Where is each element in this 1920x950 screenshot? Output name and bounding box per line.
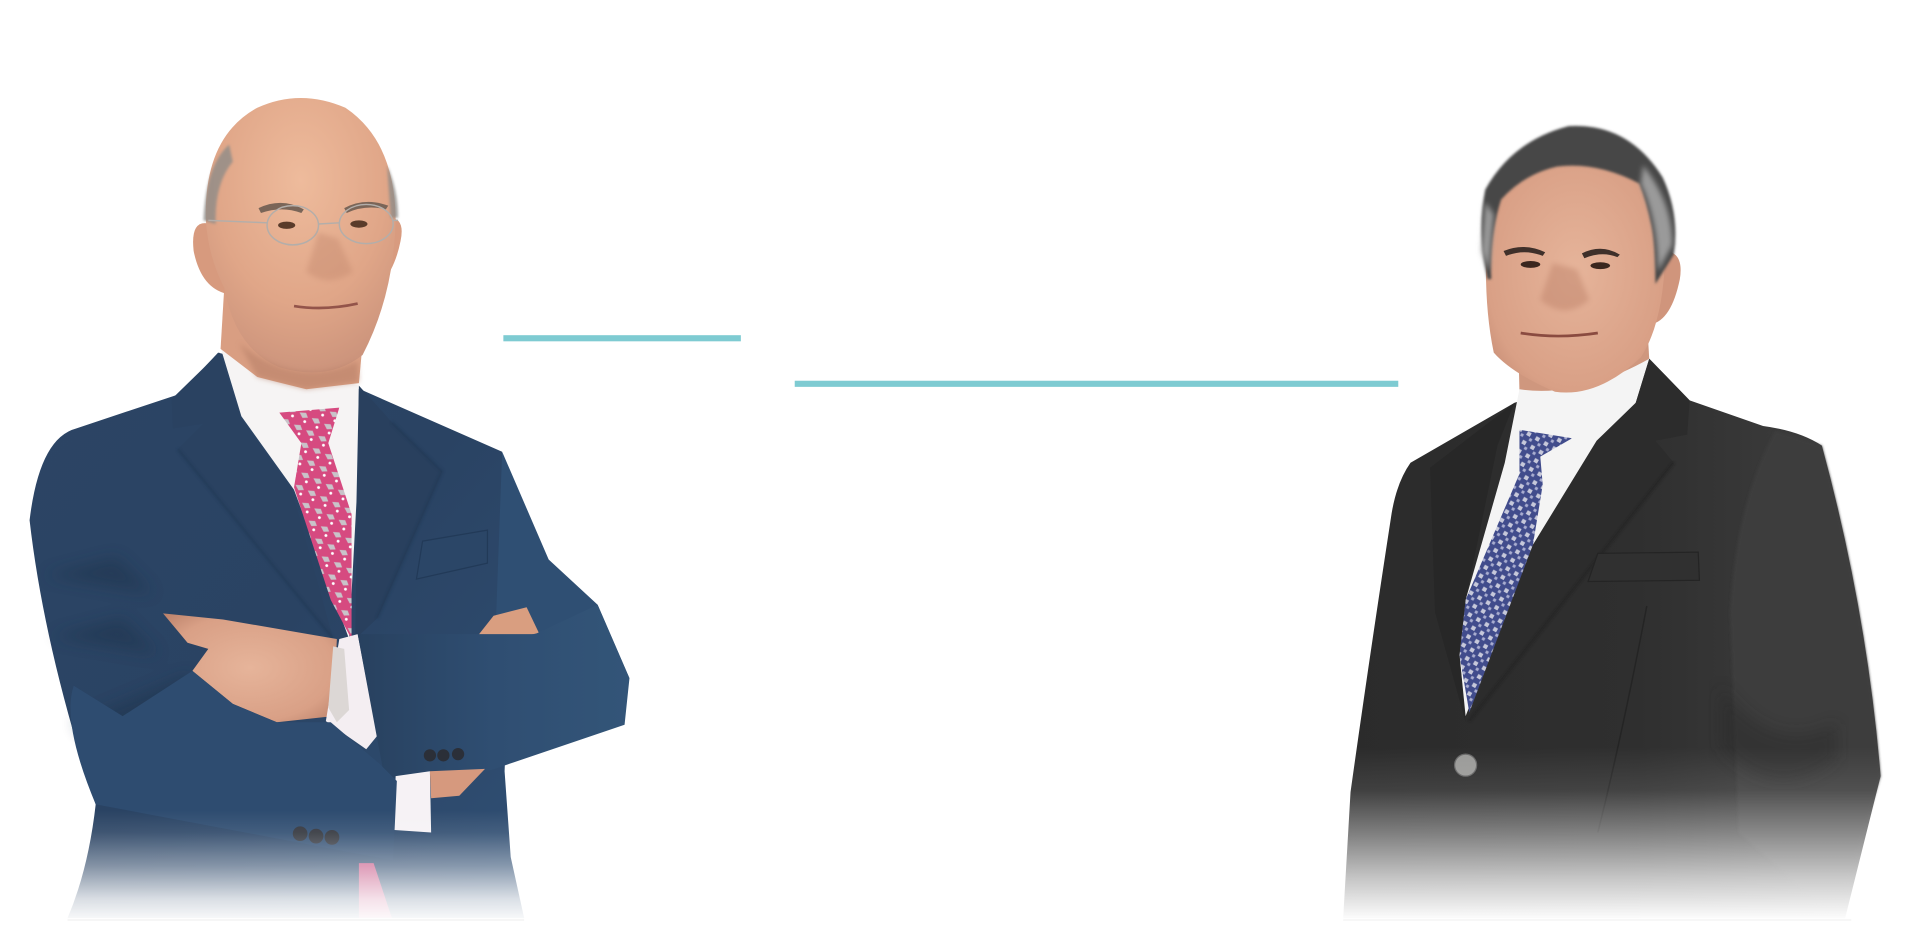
breast pocket <box>416 530 487 579</box>
rear fingers <box>475 607 539 644</box>
shirt <box>1459 359 1649 716</box>
left lapel <box>172 353 333 639</box>
lower tie <box>359 863 392 918</box>
fold shadows on upper arm <box>44 557 196 765</box>
right upper arm <box>496 452 629 678</box>
nose <box>1540 263 1589 310</box>
side shadow <box>1720 686 1837 781</box>
left ear <box>193 223 227 294</box>
eyebrows <box>1504 247 1620 258</box>
crossing forearm sleeve <box>358 605 629 779</box>
side hair <box>203 144 398 224</box>
breast pocket <box>1588 552 1699 582</box>
tie <box>279 408 352 639</box>
lower shirt cuff <box>394 771 431 832</box>
right ear <box>377 218 402 288</box>
head <box>206 98 396 372</box>
eyes <box>278 220 367 229</box>
mouth <box>294 304 358 308</box>
neck <box>221 288 364 389</box>
nose <box>306 233 353 280</box>
person: right executive in charcoal suit <box>1328 126 1904 921</box>
fade <box>37 810 539 921</box>
neck <box>1518 318 1649 404</box>
head <box>1486 149 1665 393</box>
jacket body <box>30 353 524 918</box>
eyebrows <box>259 202 388 213</box>
cuff <box>326 634 377 749</box>
person: left executive in navy suit <box>30 98 629 921</box>
main lapel <box>1469 359 1690 721</box>
lower sleeve buttons <box>293 826 339 845</box>
mouth <box>1521 333 1598 336</box>
forearm buttons <box>424 748 464 761</box>
accent bar: short <box>503 335 741 341</box>
tie <box>1459 430 1572 712</box>
accent bar: long <box>795 381 1398 387</box>
chin shadow <box>239 343 359 389</box>
lapel shadow <box>178 422 442 639</box>
right sleeve tone <box>1730 431 1881 918</box>
lower wrist <box>430 769 485 798</box>
coat button <box>1455 754 1477 776</box>
right ear <box>1650 251 1681 324</box>
hair highlights <box>1482 165 1672 272</box>
forward hand <box>163 613 337 722</box>
watch <box>328 646 349 722</box>
jacket body <box>1343 359 1881 918</box>
front seam <box>1598 606 1647 832</box>
lower sleeve <box>70 671 397 861</box>
left lapel <box>1430 403 1515 722</box>
eyes <box>1521 261 1610 269</box>
glasses <box>208 204 398 245</box>
shirt <box>221 348 359 639</box>
fade <box>1328 747 1904 921</box>
lapel edge <box>1469 463 1674 721</box>
right lapel <box>355 386 442 639</box>
hair <box>1481 126 1675 284</box>
